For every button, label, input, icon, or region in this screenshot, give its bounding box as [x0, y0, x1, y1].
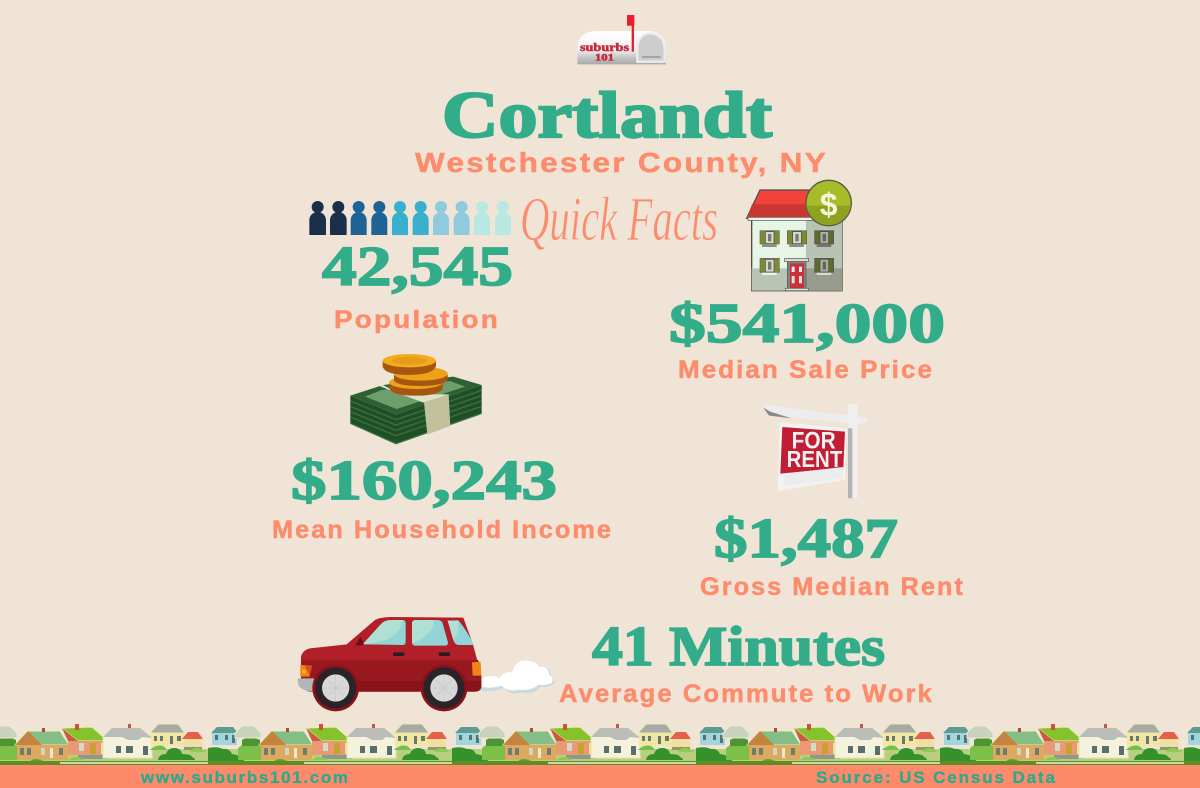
icon: house with dollar badge	[747, 180, 851, 291]
population value: 42,545	[322, 236, 513, 298]
stat: median sale price	[669, 293, 945, 384]
footer band	[0, 765, 1200, 788]
population label: Population	[334, 306, 500, 334]
icon: for rent sign: RENT	[787, 446, 842, 472]
income value: $160,243	[291, 450, 557, 512]
icon: house with dollar badge: $	[820, 187, 838, 223]
sale price label: Median Sale Price	[678, 356, 934, 384]
icon: population people row	[309, 201, 511, 235]
icon: for rent sign	[763, 404, 868, 498]
stat: mean household income	[272, 450, 613, 544]
icon: red car with exhaust	[298, 617, 555, 711]
stat: commute	[559, 616, 934, 708]
footer: source: Source: US Census Data	[816, 768, 1056, 787]
title: Cortlandt	[442, 79, 772, 152]
commute label: Average Commute to Work	[559, 680, 934, 708]
neighborhood illustration strip	[0, 724, 1200, 765]
heading: quick facts: Quick Facts	[520, 186, 718, 254]
stat: population	[322, 236, 513, 334]
income label: Mean Household Income	[272, 516, 613, 544]
rent label: Gross Median Rent	[700, 573, 965, 601]
sale price value: $541,000	[669, 293, 945, 355]
icon: cash stack and coins	[350, 354, 482, 444]
commute value: 41 Minutes	[592, 616, 885, 678]
subtitle: Westchester County, NY	[415, 147, 828, 178]
icon: for rent sign: FOR	[792, 427, 836, 454]
logo: suburbs 101 mailbox: suburbs	[580, 42, 630, 54]
footer: website: www.suburbs101.com	[140, 768, 348, 787]
stat: gross median rent	[700, 508, 965, 601]
logo: suburbs 101 mailbox	[577, 15, 666, 64]
rent value: $1,487	[714, 508, 898, 570]
logo: suburbs 101 mailbox: 101	[595, 53, 614, 63]
